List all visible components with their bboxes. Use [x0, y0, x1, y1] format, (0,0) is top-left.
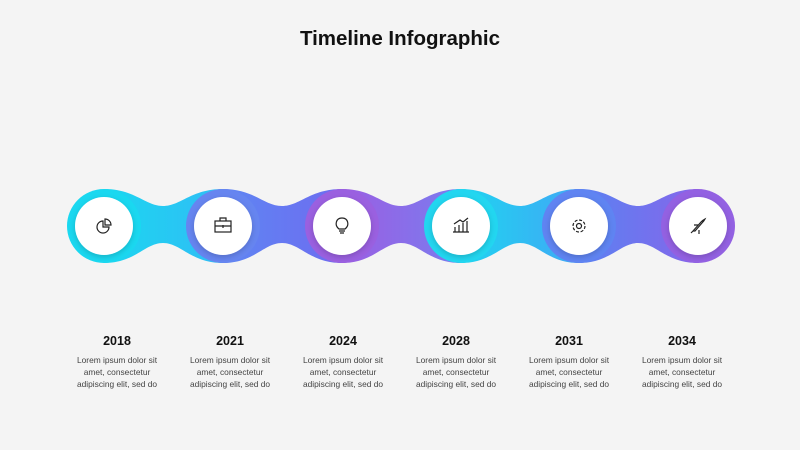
- icon: pie chart: [97, 219, 111, 233]
- step 2021: 2021: [216, 334, 244, 348]
- step 2018: Lorem ipsum dolor sit: [77, 355, 157, 365]
- icons: [97, 218, 705, 234]
- white inner circles: [75, 197, 727, 255]
- icon: gear: [573, 220, 585, 232]
- step 2021: [190, 334, 270, 389]
- step 2031: Lorem ipsum dolor sit: [529, 355, 609, 365]
- band segments: [104, 189, 698, 263]
- step 2034: [642, 334, 722, 389]
- step 2024: amet, consectetur: [310, 367, 376, 377]
- step 2028: [416, 334, 496, 389]
- step 2024: 2024: [329, 334, 357, 348]
- step 2031: amet, consectetur: [536, 367, 602, 377]
- step 2024: Lorem ipsum dolor sit: [303, 355, 383, 365]
- step 2034: amet, consectetur: [649, 367, 715, 377]
- step 2024: [303, 334, 383, 389]
- step 2024: adipiscing elit, sed do: [303, 379, 383, 389]
- step 2018: 2018: [103, 334, 131, 348]
- title: Timeline Infographic: [300, 27, 500, 50]
- step 2031: [529, 334, 609, 389]
- step 2021: amet, consectetur: [197, 367, 263, 377]
- step 2018: adipiscing elit, sed do: [77, 379, 157, 389]
- step 2028: 2028: [442, 334, 470, 348]
- step 2028: adipiscing elit, sed do: [416, 379, 496, 389]
- step 2034: 2034: [668, 334, 696, 348]
- icon: bar chart: [453, 218, 469, 232]
- step 2021: adipiscing elit, sed do: [190, 379, 270, 389]
- step 2034: adipiscing elit, sed do: [642, 379, 722, 389]
- step 2021: Lorem ipsum dolor sit: [190, 355, 270, 365]
- step 2028: amet, consectetur: [423, 367, 489, 377]
- step 2028: Lorem ipsum dolor sit: [416, 355, 496, 365]
- step 2034: Lorem ipsum dolor sit: [642, 355, 722, 365]
- icon: bulb: [336, 218, 348, 233]
- step 2031: adipiscing elit, sed do: [529, 379, 609, 389]
- step 2031: 2031: [555, 334, 583, 348]
- step 2018: [77, 334, 157, 389]
- outer circles: [67, 189, 735, 263]
- icon: briefcase: [215, 218, 231, 232]
- step 2018: amet, consectetur: [84, 367, 150, 377]
- icon: rocket: [691, 219, 705, 234]
